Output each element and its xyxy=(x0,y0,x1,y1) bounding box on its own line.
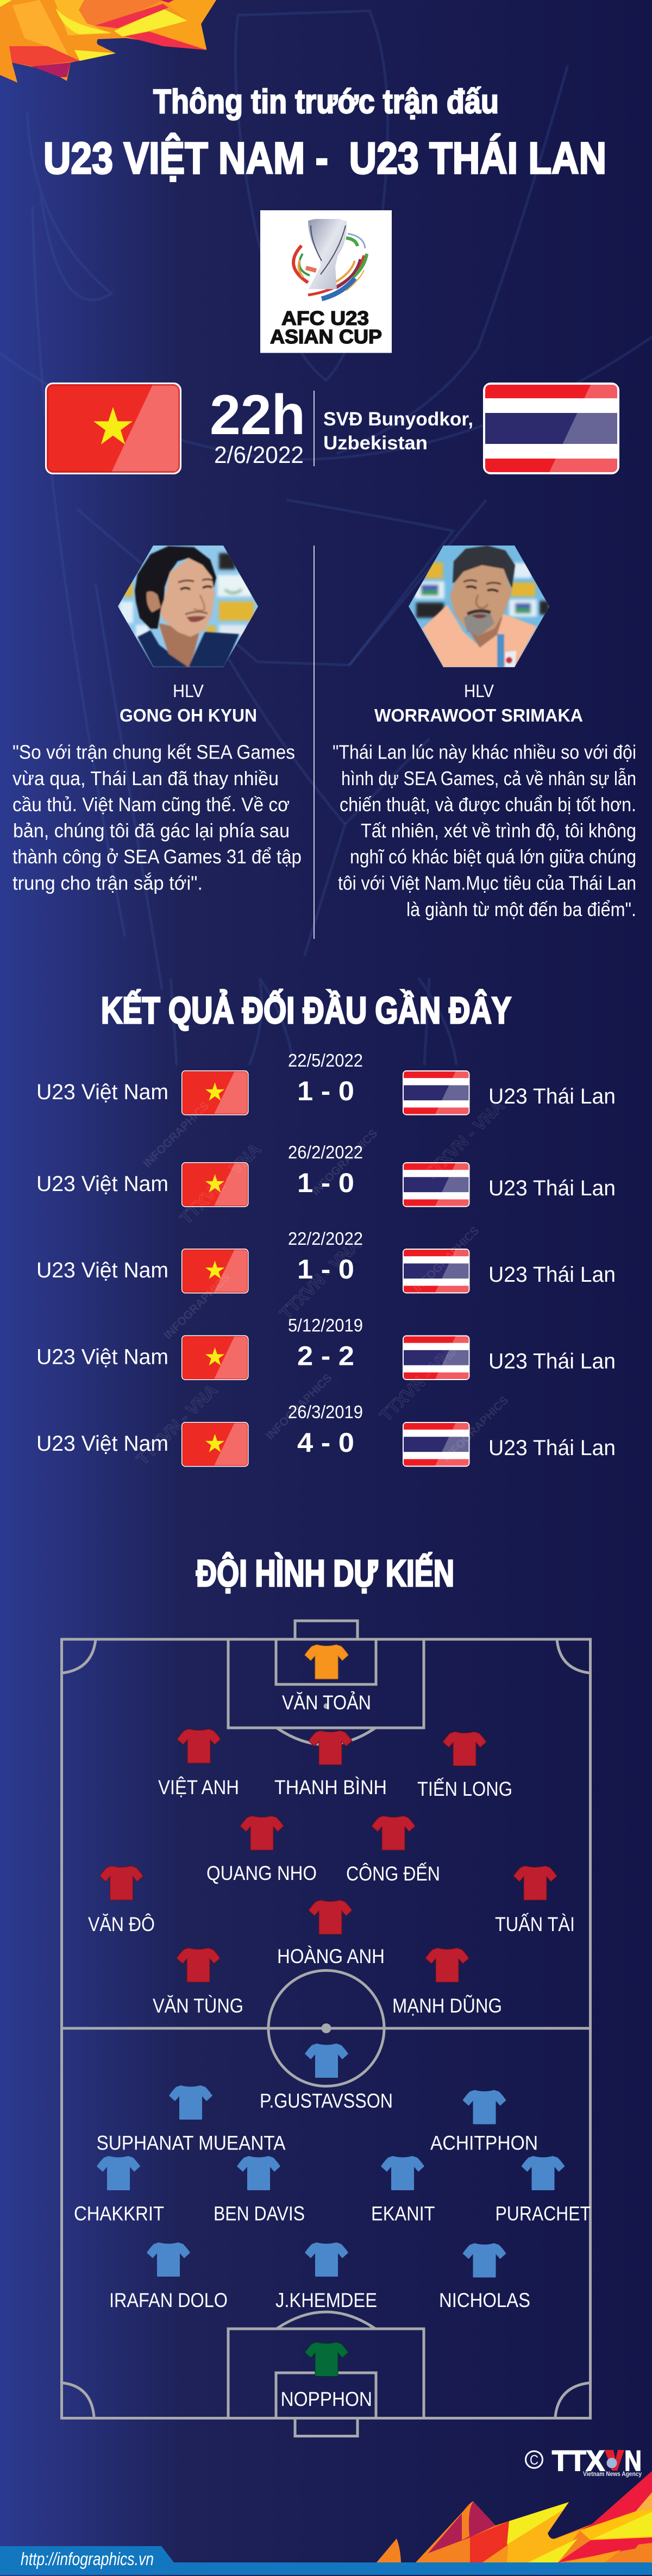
coach right: quote xyxy=(333,741,636,920)
Vietnam lineup: VĂN TOẢN xyxy=(282,1691,371,1714)
AFC U23 Asian Cup logo xyxy=(260,210,392,353)
Vietnam lineup: VĂN ĐÔ xyxy=(88,1913,155,1935)
title line 1: Thông tin trước trận đấu xyxy=(153,83,499,121)
result row 3: 22/2/2022 xyxy=(288,1229,363,1249)
result row 1: 1 - 0 xyxy=(297,1076,354,1106)
coach right: name xyxy=(374,681,583,725)
Vietnam lineup: VĂN TÙNG xyxy=(153,1995,243,2017)
Thailand lineup: NICHOLAS xyxy=(439,2289,530,2311)
coach left: quote: vừa qua, Thái Lan đã thay nhiều xyxy=(12,767,279,789)
result row 3: U23 Việt Nam xyxy=(36,1258,168,1282)
agency watermarks: TTXVN - VNA xyxy=(276,1234,365,1323)
TTXVN copyright logo: Vietnam News Agency xyxy=(583,2470,642,2478)
result row 4 xyxy=(36,1315,616,1380)
Vietnam lineup xyxy=(88,1645,575,2017)
agency watermarks: INFOGRAPHICS xyxy=(264,1371,334,1442)
venue divider xyxy=(314,391,315,466)
Vietnam lineup: TIẾN LONG xyxy=(417,1778,512,1800)
Vietnam lineup: CÔNG ĐẾN xyxy=(346,1863,440,1885)
coach left: name: HLV xyxy=(173,681,204,701)
Thailand lineup: ACHITPHON xyxy=(430,2132,538,2154)
Thailand lineup: IRAFAN DOLO xyxy=(109,2289,228,2311)
agency watermarks: TTXVN - VNA xyxy=(133,1380,221,1469)
result row 3: U23 Thái Lan xyxy=(488,1263,616,1287)
Thailand lineup: SUPHANAT MUEANTA xyxy=(97,2132,286,2154)
Thailand lineup: NOPPHON xyxy=(280,2388,372,2410)
Vietnam lineup: QUANG NHO xyxy=(206,1862,317,1884)
coach left: name: GONG OH KYUN xyxy=(120,705,257,725)
agency watermarks: TTXVN - VNA xyxy=(176,1139,265,1228)
result row 3 xyxy=(36,1229,616,1293)
photo: coach Worrawoot Srimaka xyxy=(409,546,549,667)
result row 2: U23 Việt Nam xyxy=(36,1172,168,1196)
AFC U23 Asian Cup logo: ASIAN CUP xyxy=(270,325,382,348)
result row 2: U23 Thái Lan xyxy=(488,1176,616,1200)
result row 4: U23 Việt Nam xyxy=(36,1345,168,1369)
result row 4: 5/12/2019 xyxy=(288,1315,363,1336)
TTXVN copyright logo xyxy=(526,2445,642,2478)
result row 1: 22/5/2022 xyxy=(288,1050,363,1070)
Thailand lineup: EKANIT xyxy=(371,2203,435,2224)
result row 2 xyxy=(36,1142,616,1207)
result row 2: 26/2/2022 xyxy=(288,1142,363,1162)
Thailand lineup xyxy=(74,2044,591,2410)
agency watermarks: TTXVN - VNA xyxy=(376,1337,465,1425)
heading: expected lineup: ĐỘI HÌNH DỰ KIẾN xyxy=(196,1552,454,1594)
Vietnam lineup: VIỆT ANH xyxy=(158,1776,239,1798)
Thailand lineup: PURACHET xyxy=(496,2203,591,2224)
venue: SVĐ Bunyodkor, xyxy=(323,409,473,430)
venue xyxy=(323,409,473,454)
agency watermarks: TTXVN - VNA xyxy=(419,1096,508,1184)
match date: 2/6/2022 xyxy=(214,442,304,468)
coach left: quote: bản, chúng tôi đã gác lại phía sau xyxy=(13,819,290,842)
agency watermarks: INFOGRAPHICS xyxy=(141,1099,211,1170)
coach right: name: HLV xyxy=(464,681,494,701)
coach left: quote: "So với trận chung kết SEA Games xyxy=(12,741,295,763)
coaches column divider xyxy=(314,546,315,939)
goalkeeper shirt: Nopphon xyxy=(305,2342,348,2377)
Vietnam lineup: TUẤN TÀI xyxy=(495,1913,575,1935)
agency watermarks: INFOGRAPHICS xyxy=(309,1127,380,1198)
goalkeeper shirt: Văn Toản xyxy=(305,1645,348,1679)
result row 4: 2 - 2 xyxy=(297,1341,354,1371)
Thailand lineup: P.GUSTAVSSON xyxy=(260,2090,393,2112)
background trophy line pattern xyxy=(0,11,652,1065)
result row 1: U23 Việt Nam xyxy=(36,1080,168,1104)
TTXVN copyright logo: TTX xyxy=(552,2445,605,2477)
agency watermarks: INFOGRAPHICS xyxy=(440,1394,511,1464)
footer bar: http://infographics.vn xyxy=(21,2549,154,2569)
kick-off time: 22h xyxy=(210,384,305,447)
result row 1 xyxy=(36,1050,616,1115)
Vietnam lineup: THANH BÌNH xyxy=(274,1776,387,1798)
result row 5: 4 - 0 xyxy=(297,1427,354,1458)
result row 1: U23 Thái Lan xyxy=(488,1085,616,1108)
coach right: name: WORRAWOOT SRIMAKA xyxy=(374,705,583,725)
football pitch xyxy=(61,1621,591,2436)
TTXVN copyright logo: C xyxy=(530,2453,538,2468)
AFC U23 Asian Cup logo: AFC U23 xyxy=(281,307,369,329)
result row 4: U23 Thái Lan xyxy=(488,1350,616,1374)
logo ribbons xyxy=(293,234,367,299)
agency watermarks: INFOGRAPHICS xyxy=(411,1224,481,1295)
agency watermarks xyxy=(133,1096,511,1469)
logo trophy xyxy=(308,219,347,289)
coach left: quote: thành công ở SEA Games 31 để tập xyxy=(12,845,302,868)
result row 5: U23 Việt Nam xyxy=(36,1432,168,1456)
footer bar xyxy=(0,2546,652,2575)
Thailand lineup: BEN DAVIS xyxy=(214,2203,305,2224)
Vietnam lineup: HOÀNG ANH xyxy=(277,1945,385,1967)
result row 2: 1 - 0 xyxy=(297,1168,354,1198)
coach left: quote: cầu thủ. Việt Nam cũng thế. Về cơ xyxy=(12,793,290,816)
heading: recent results: KẾT QUẢ ĐỐI ĐẦU GẦN ĐÂY xyxy=(101,989,511,1031)
Thailand flag large xyxy=(484,384,618,474)
result row 5: 26/3/2019 xyxy=(288,1402,363,1422)
result row 5 xyxy=(36,1402,616,1466)
agency watermarks: INFOGRAPHICS xyxy=(161,1271,232,1342)
coach left: quote: trung cho trận sắp tới". xyxy=(12,872,203,894)
Thailand lineup: CHAKKRIT xyxy=(74,2203,164,2224)
coach left: quote xyxy=(12,741,302,894)
Vietnam lineup: MẠNH DŨNG xyxy=(392,1995,502,2017)
venue: Uzbekistan xyxy=(323,433,428,454)
Thailand lineup: J.KHEMDEE xyxy=(275,2289,377,2311)
TTXVN copyright logo: N xyxy=(624,2445,642,2477)
top-left flame decoration xyxy=(0,0,216,83)
bottom-right flame decoration xyxy=(377,2471,652,2562)
result row 3: 1 - 0 xyxy=(297,1254,354,1284)
Vietnam flag large xyxy=(46,384,180,474)
result row 5: U23 Thái Lan xyxy=(488,1436,616,1460)
photo: coach Gong Oh Kyun xyxy=(118,546,258,667)
coach left: name xyxy=(120,681,257,725)
